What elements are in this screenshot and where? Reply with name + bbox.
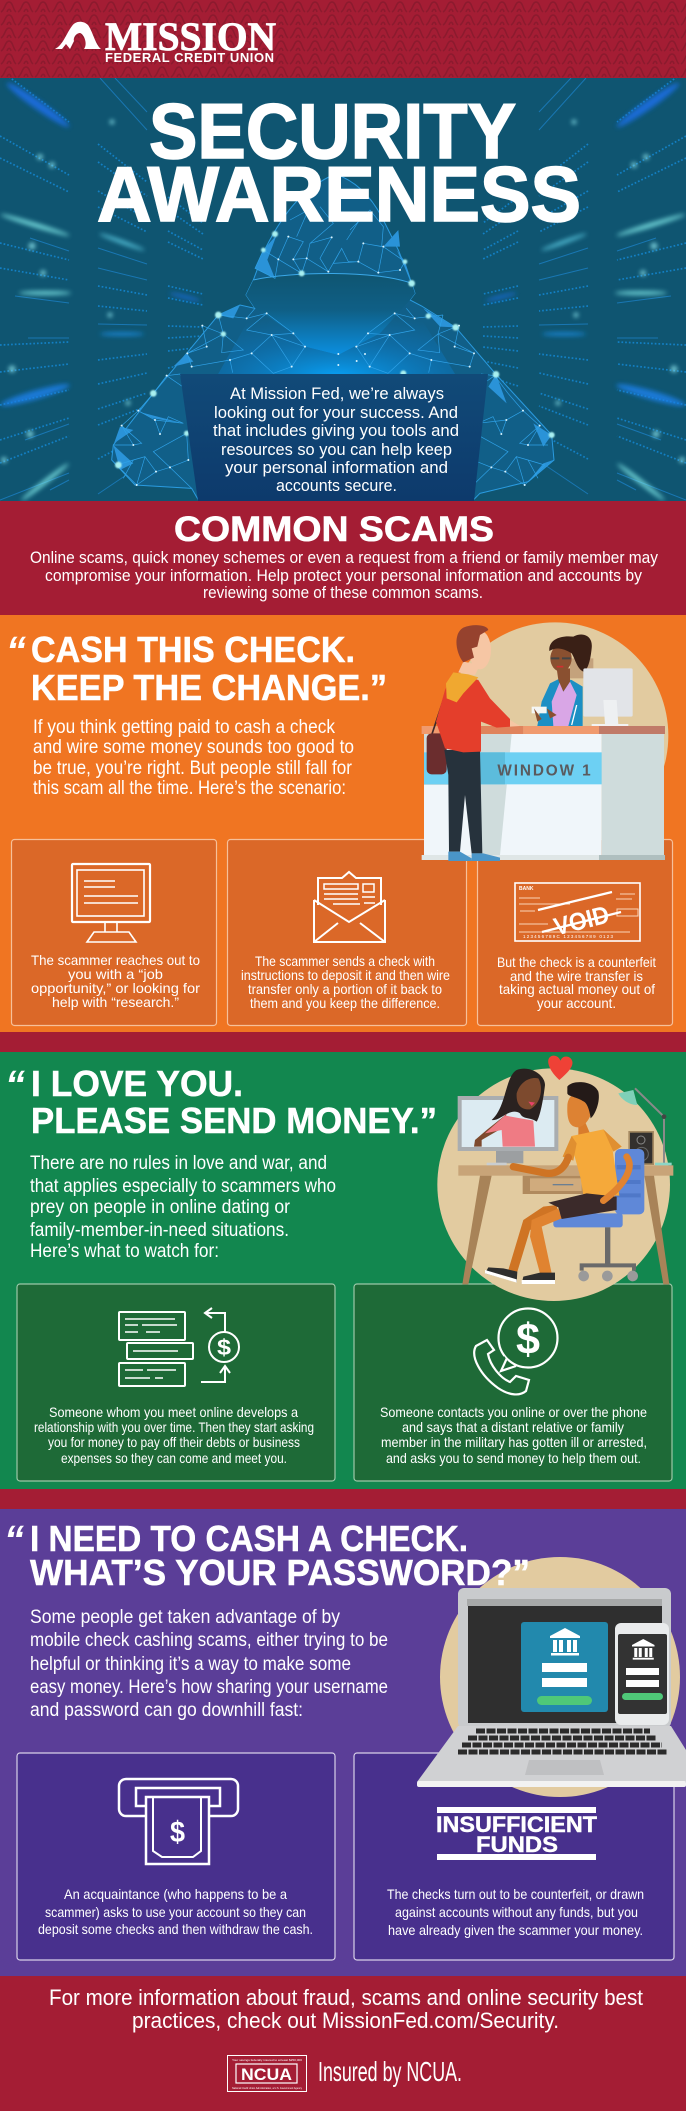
card text (38, 1886, 313, 1937)
illustration: hooded figure (112, 174, 555, 500)
title: Security Awareness (98, 102, 579, 223)
card text (241, 953, 450, 1011)
paragraph: romance scam intro: that applies especially to scammers who (30, 1176, 336, 1197)
card text (34, 1404, 314, 1466)
heading: need to cash a check: WHAT’S YOUR PASSWORD?” (30, 1552, 530, 1593)
card text: and the wire transfer is (510, 968, 643, 984)
intro paragraph: your personal information and (225, 458, 448, 477)
paragraph: check scam intro: If you think getting paid to cash a check (33, 717, 335, 738)
laptop (417, 1588, 686, 1787)
common scams paragraph: compromise your information. Help protect your personal information and accounts by (45, 566, 642, 585)
stamp: insufficient funds (436, 1807, 598, 1860)
paragraph: romance scam intro: prey on people in online dating or (30, 1197, 291, 1218)
card: counterfeit check (478, 840, 672, 1026)
logo: Mission Federal Credit Union: FEDERAL CREDIT UNION (105, 50, 274, 65)
insured by NCUA: Insured by NCUA. (318, 2056, 462, 2087)
card: online relationship (17, 1284, 335, 1481)
intro text box (180, 374, 488, 501)
card: relative in need (354, 1284, 672, 1481)
card text: expenses so they can come and meet you. (61, 1450, 287, 1466)
card text: them and you keep the difference. (250, 995, 440, 1011)
card text (387, 1886, 644, 1938)
icon: chat messages and money: $ (217, 1335, 231, 1360)
illustration: bank teller window (422, 622, 668, 861)
title: Security Awareness: AWARENESS (97, 150, 581, 238)
title: Security Awareness: SECURITY (149, 87, 516, 175)
paragraph: check scam intro (33, 717, 354, 799)
card text: your account. (537, 995, 616, 1011)
icon: cash from ATM slot (119, 1779, 238, 1864)
divider band (0, 1032, 686, 1052)
desk (458, 1165, 673, 1284)
icon: cash from ATM slot: $ (170, 1816, 185, 1849)
paragraph: romance scam intro: There are no rules in love and war, and (30, 1153, 327, 1174)
intro paragraph (213, 384, 459, 495)
login card (521, 1622, 608, 1712)
paragraph: mobile check scam intro: easy money. Here’s how sharing your username (30, 1677, 388, 1698)
intro paragraph: At Mission Fed, we’re always (230, 384, 444, 403)
intro paragraph: looking out for your success. And (214, 403, 458, 422)
card: acquaintance uses account (17, 1753, 335, 1960)
logo: Mission Federal Credit Union: MISSION (105, 14, 276, 59)
panel: footer (0, 1976, 686, 2111)
card text: The scammer reaches out to (31, 952, 200, 968)
icon: voided check: 123456789C 123456789 0123 (523, 934, 613, 939)
heading: i love you: “ (5, 1063, 25, 1107)
computer monitor (583, 668, 633, 726)
panel: hero (0, 70, 686, 502)
badge: NCUA: NCUA (241, 2065, 292, 2084)
icon: envelope with letter (314, 872, 385, 942)
customer (427, 625, 520, 861)
teller (532, 634, 592, 726)
paragraph: mobile check scam intro: mobile check cashing scams, either trying to be (30, 1630, 388, 1651)
panel: password scam (0, 1509, 686, 1976)
card text: An acquaintance (who happens to be a (64, 1886, 287, 1902)
paragraph: check scam intro: and wire some money sounds too good to (33, 737, 354, 758)
paragraph: mobile check scam intro: Some people get taken advantage of by (30, 1607, 340, 1628)
card text: against accounts without any funds, but you (395, 1904, 638, 1920)
heading: i love you: PLEASE SEND MONEY.” (31, 1100, 437, 1141)
card text: and says that a distant relative or family (402, 1419, 624, 1435)
card text: relationship with you over time. Then they start asking (34, 1419, 314, 1435)
footer call to action: practices, check out MissionFed.com/Security. (132, 2008, 559, 2033)
paragraph: check scam intro: be true, you’re right. But people still fall for (33, 758, 353, 779)
phone (615, 1623, 669, 1725)
heading: cash this check: “ (6, 629, 26, 673)
card: insufficient funds (354, 1753, 674, 1960)
card text: you with a “job (68, 966, 163, 982)
heading: cash this check: KEEP THE CHANGE.” (31, 667, 387, 708)
illustration: laptop and phone login (417, 1557, 686, 1797)
paragraph: romance scam intro (30, 1153, 336, 1262)
paragraph: mobile check scam intro: helpful or thinking it’s a way to make some (30, 1654, 351, 1675)
heading: need to cash a check: I NEED TO CASH A CHECK. (30, 1518, 468, 1559)
icon: voided check: VOID (551, 901, 612, 941)
footer call to action: For more information about fraud, scams and online security best (49, 1985, 643, 2010)
card text: Someone contacts you online or over the phone (380, 1404, 647, 1420)
paragraph: romance scam intro: family-member-in-need situations. (30, 1220, 289, 1241)
heading: need to cash a check: “ (4, 1518, 24, 1562)
card text: and asks you to send money to help them out. (386, 1450, 641, 1466)
heading: i love you: I LOVE YOU. (31, 1063, 243, 1104)
counter (422, 726, 665, 860)
divider band (0, 1489, 686, 1509)
card text: member in the military has gotten ill or arrested, (381, 1434, 647, 1450)
paragraph: mobile check scam intro: and password can go downhill fast: (30, 1700, 303, 1721)
panel: romance scam (0, 1052, 686, 1489)
card text: help with “research.” (52, 994, 179, 1010)
man (485, 1082, 629, 1284)
paragraph: mobile check scam intro (30, 1607, 388, 1721)
badge: NCUA: Your savings federally insured to at least $250,000 (232, 2058, 302, 2062)
computer with woman on screen (458, 1069, 558, 1166)
paragraph: romance scam intro: Here’s what to watch for: (30, 1241, 219, 1262)
lamp (618, 1088, 672, 1165)
card text (31, 952, 200, 1010)
logo: Mission Federal Credit Union (55, 14, 276, 65)
card text: But the check is a counterfeit (497, 954, 656, 970)
card text: taking actual money out of (499, 981, 655, 997)
footer call to action (49, 1985, 643, 2033)
panel: cash this check scam (0, 615, 686, 1032)
card text: The checks turn out to be counterfeit, or drawn (387, 1886, 644, 1902)
card text: Someone whom you meet online develops a (49, 1404, 298, 1420)
common scams paragraph: reviewing some of these common scams. (203, 583, 483, 602)
badge: NCUA: National Credit Union Administration, a U.S. Government Agency (232, 2086, 302, 2090)
heading: i love you (5, 1063, 437, 1141)
stamp: insufficient funds: FUNDS (476, 1832, 558, 1857)
card text: The scammer sends a check with (255, 953, 435, 969)
heading: cash this check: CASH THIS CHECK. (31, 629, 355, 670)
card: check with instructions (228, 840, 466, 1026)
card text: have already given the scammer your money. (388, 1922, 643, 1938)
sign: window 1: WINDOW 1 (497, 763, 591, 780)
panel: header band (0, 0, 686, 78)
intro paragraph: accounts secure. (276, 476, 397, 495)
card text (497, 954, 656, 1011)
icon: voided check (515, 883, 640, 941)
badge: NCUA (228, 2056, 306, 2092)
card text: you for money to pay off their debts or business (48, 1434, 300, 1450)
intro paragraph: that includes giving you tools and (213, 421, 459, 440)
card text: scammer) asks to use your account so they can (45, 1904, 306, 1920)
paragraph: check scam intro: this scam all the time. Here’s the scenario: (33, 778, 346, 799)
light rays background (0, 70, 686, 502)
icon: chat messages and money (119, 1308, 239, 1386)
icon: heart (548, 1056, 573, 1080)
common scams paragraph (30, 548, 658, 602)
card text: transfer only a portion of it back to (248, 981, 442, 997)
card text: opportunity,” or looking for (31, 980, 200, 996)
office chair (553, 1149, 644, 1281)
icon: computer monitor (72, 864, 150, 942)
stamp: insufficient funds: INSUFFICIENT (436, 1812, 598, 1837)
heading: need to cash a check (4, 1518, 530, 1593)
card text (380, 1404, 647, 1466)
card text: instructions to deposit it and then wire (241, 967, 450, 983)
speaker (628, 1131, 654, 1165)
intro paragraph: resources so you can help keep (221, 440, 452, 459)
illustration: online romance at a desk (437, 1056, 673, 1301)
panel: common scams (0, 501, 686, 615)
heading: common scams: COMMON SCAMS (174, 510, 494, 549)
card text: deposit some checks and then withdraw the cash. (38, 1921, 313, 1937)
heading: cash this check (6, 629, 387, 708)
icon: phone and money bubble (474, 1308, 558, 1394)
card: job opportunity (12, 840, 216, 1026)
icon: phone and money bubble: $ (516, 1315, 540, 1364)
icon: voided check: BANK (519, 886, 534, 892)
